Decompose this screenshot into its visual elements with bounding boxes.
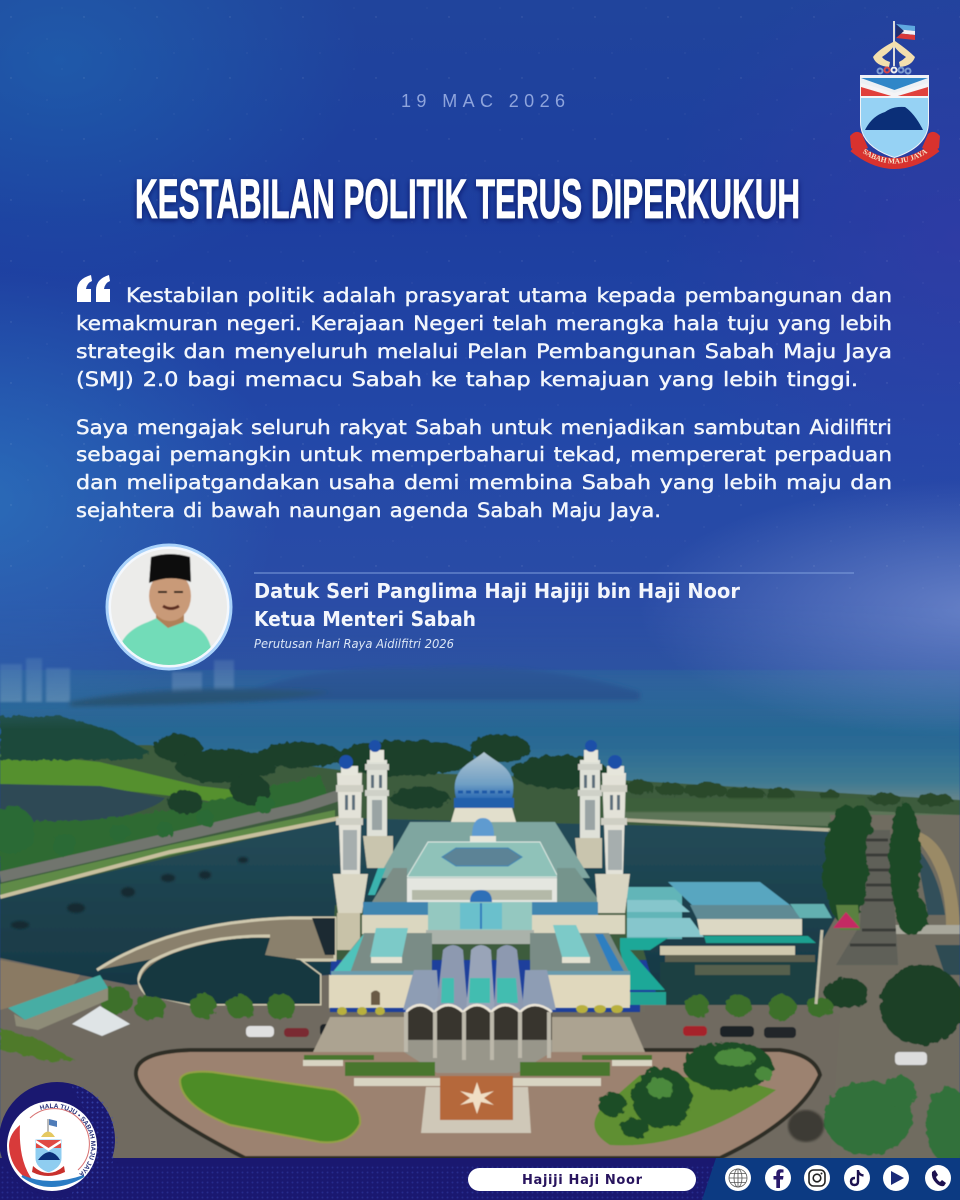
icon: website [725, 1165, 751, 1191]
coast road [0, 795, 340, 877]
right big trees [824, 965, 960, 1045]
left teal strip [368, 868, 386, 895]
message paragraph 1: kemakmuran negeri. Kerajaan Negeri telah merangka hala tuju yang lebih [76, 312, 892, 335]
green canopy top [620, 938, 668, 990]
sky glow right [640, 480, 960, 740]
right lawn palms [598, 1042, 773, 1138]
road shadow [788, 1110, 824, 1142]
tree avenue road [836, 830, 898, 965]
signature role: Ketua Menteri Sabah [254, 607, 476, 631]
sky glow left [0, 270, 280, 730]
message paragraph 2: sejahtera di bawah naungan agenda Sabah Maju Jaya. [76, 499, 661, 522]
message paragraph 1: (SMJ) 2.0 bagi memacu Sabah ke tahap kemajuan yang lebih tinggi. [76, 368, 858, 391]
main dome [448, 752, 519, 832]
pink canopy [833, 912, 860, 928]
icon: youtube play [883, 1165, 909, 1191]
annex deck shadow [665, 955, 815, 962]
ribbon [850, 132, 940, 164]
message paragraph 2: dan melipatgandakan usaha demi membina Sabah yang lebih maju dan [76, 471, 892, 494]
left lower roof [331, 928, 432, 975]
signature source: Perutusan Hari Raya Aidilfitri 2026 [254, 636, 454, 651]
front cream ledges [303, 1060, 652, 1086]
signature rule [254, 572, 854, 574]
annex green strip [704, 936, 816, 943]
right lower roof [530, 925, 630, 975]
badge navy disc [0, 1082, 115, 1198]
oval plaza [136, 1050, 820, 1158]
star paving [421, 1076, 531, 1133]
flag pole [893, 21, 895, 66]
green canopy lower [629, 992, 666, 1005]
message paragraph 2: sebagai pemangkin untuk memperbaharui tekad, mempererat perpaduan [76, 443, 892, 466]
tree avenue shadows [850, 840, 896, 945]
quote mark icon [77, 275, 110, 302]
pond curb [0, 818, 340, 897]
round pond water [139, 938, 320, 1004]
shoreline land [0, 745, 960, 960]
right water 2 [935, 945, 960, 975]
flag [896, 24, 915, 40]
octagon skylight [442, 848, 522, 866]
songkok [149, 554, 191, 583]
right lawn [594, 1075, 776, 1145]
far shore curb [625, 820, 830, 830]
far tree mass left [0, 716, 150, 760]
front left minaret [333, 755, 368, 950]
right water [915, 845, 945, 915]
pier curb [816, 930, 822, 1004]
icon: phone [925, 1165, 951, 1191]
portrait ring [107, 545, 231, 669]
centre roof [426, 902, 534, 944]
far peninsula [70, 689, 330, 706]
right annex water [660, 962, 818, 1005]
blue band [702, 1158, 960, 1200]
badge curved text: HALA TUJU • SABAH MAJU JAYA [40, 1104, 96, 1176]
side roof slopes [372, 868, 407, 902]
campaign badge [0, 1082, 118, 1198]
hands holding pole [873, 41, 915, 67]
message paragraph 2 [76, 416, 892, 522]
annex lower roof [690, 905, 802, 919]
annex side roof [790, 904, 832, 918]
side roof slopes right [557, 868, 600, 902]
small dome [470, 818, 496, 842]
left small pond [0, 784, 165, 828]
right lower land [640, 815, 960, 1160]
main pond [0, 818, 840, 1006]
front right minaret [595, 755, 630, 913]
portrait background [111, 549, 227, 646]
back roofs [378, 822, 590, 878]
wreath [878, 68, 910, 74]
annex pale roofs [627, 900, 704, 937]
distant hills [230, 666, 640, 700]
icon: facebook [765, 1165, 791, 1191]
forecourt right [552, 1017, 645, 1052]
palm highlights [647, 1049, 773, 1098]
badge crest [32, 1119, 65, 1176]
baju melayu [122, 618, 212, 665]
forecourt centre [404, 1040, 552, 1073]
date: 19 MAC 2026 [401, 91, 565, 111]
front right tree [824, 1076, 960, 1163]
avenue verge [836, 905, 860, 930]
palm row far right [626, 780, 953, 806]
navy band [0, 1158, 960, 1200]
sea [0, 670, 960, 820]
far shore trees [625, 798, 865, 812]
sky glow top right [660, 0, 960, 540]
hedge trees along driveway [100, 986, 833, 1021]
signature name: Datuk Seri Panglima Haji Hajiji bin Haji Noor [254, 579, 740, 603]
face [149, 571, 191, 621]
dome over entrance [470, 890, 492, 902]
far shore strip [625, 800, 960, 830]
badge white disc [7, 1101, 97, 1191]
tree line far [154, 734, 608, 814]
left building [8, 975, 108, 1030]
badge inner red arc [30, 1109, 89, 1170]
annex flat roofs [627, 887, 682, 939]
badge red swoosh [9, 1125, 36, 1184]
sky glow top left [0, 0, 360, 280]
arcade [404, 1005, 552, 1060]
mosque [304, 740, 652, 1076]
annex reflection [695, 965, 790, 975]
icon: tiktok [844, 1165, 870, 1191]
ribbon motto: SABAH MAJU JAYA [862, 149, 928, 164]
white tent [72, 1006, 130, 1036]
forecourt hedges [304, 1055, 652, 1076]
message paragraph 2: Saya mengajak seluruh rakyat Sabah untuk menjadikan sambutan Aidilfitri [76, 416, 892, 439]
faint speckles [0, 0, 960, 600]
palm reflections [11, 857, 248, 929]
mid wings [362, 902, 625, 934]
name pill [468, 1168, 696, 1191]
far city blocks [0, 658, 234, 702]
terrace curve [97, 918, 335, 1004]
left verge greens [0, 1028, 75, 1062]
verge below road [0, 810, 335, 895]
left tree band above road [0, 775, 330, 872]
lower walls [329, 975, 630, 1008]
right bank [912, 830, 960, 925]
annex main roof [668, 882, 790, 905]
state crest [850, 21, 940, 169]
annex wall [697, 919, 802, 935]
badge blue swoosh [22, 1176, 84, 1186]
right cross road [890, 925, 960, 934]
message paragraph 1: Kestabilan politik adalah prasyarat utama kepada pembangunan dan [126, 284, 892, 307]
message paragraph 1: strategik dan menyeluruh melalui Pelan Pembangunan Sabah Maju Jaya [76, 340, 892, 363]
annex deck [660, 946, 795, 955]
forecourt [313, 1017, 404, 1052]
right palm avenue [822, 802, 928, 935]
left bank palms [0, 797, 275, 857]
left lawn [180, 1072, 360, 1142]
portrait of chief minister [107, 545, 231, 670]
terrace dark patch [312, 918, 335, 955]
parked cars [246, 1024, 927, 1065]
lower ground [0, 958, 840, 1160]
central vaults [403, 945, 556, 1010]
icon: instagram [804, 1165, 830, 1191]
left green strip [0, 752, 278, 808]
left dry ground [0, 960, 80, 1010]
neck [156, 614, 184, 628]
back left minaret [363, 740, 393, 868]
eyes and mouth [158, 591, 183, 593]
back right minaret [575, 740, 602, 868]
dotted texture [0, 1165, 720, 1200]
footer bar [0, 1158, 960, 1200]
shield [860, 75, 929, 158]
name label: Hajiji Haji Noor [522, 1173, 643, 1188]
sky gradient overlay [0, 0, 960, 730]
right annex building [620, 882, 860, 1005]
yellow shrubs [337, 1005, 623, 1015]
badge dots [70, 1083, 117, 1197]
message paragraph 1 [76, 284, 892, 391]
background photo: mosque and waterfront [0, 658, 960, 1163]
upper roof [407, 842, 558, 877]
upper wall [407, 878, 557, 903]
